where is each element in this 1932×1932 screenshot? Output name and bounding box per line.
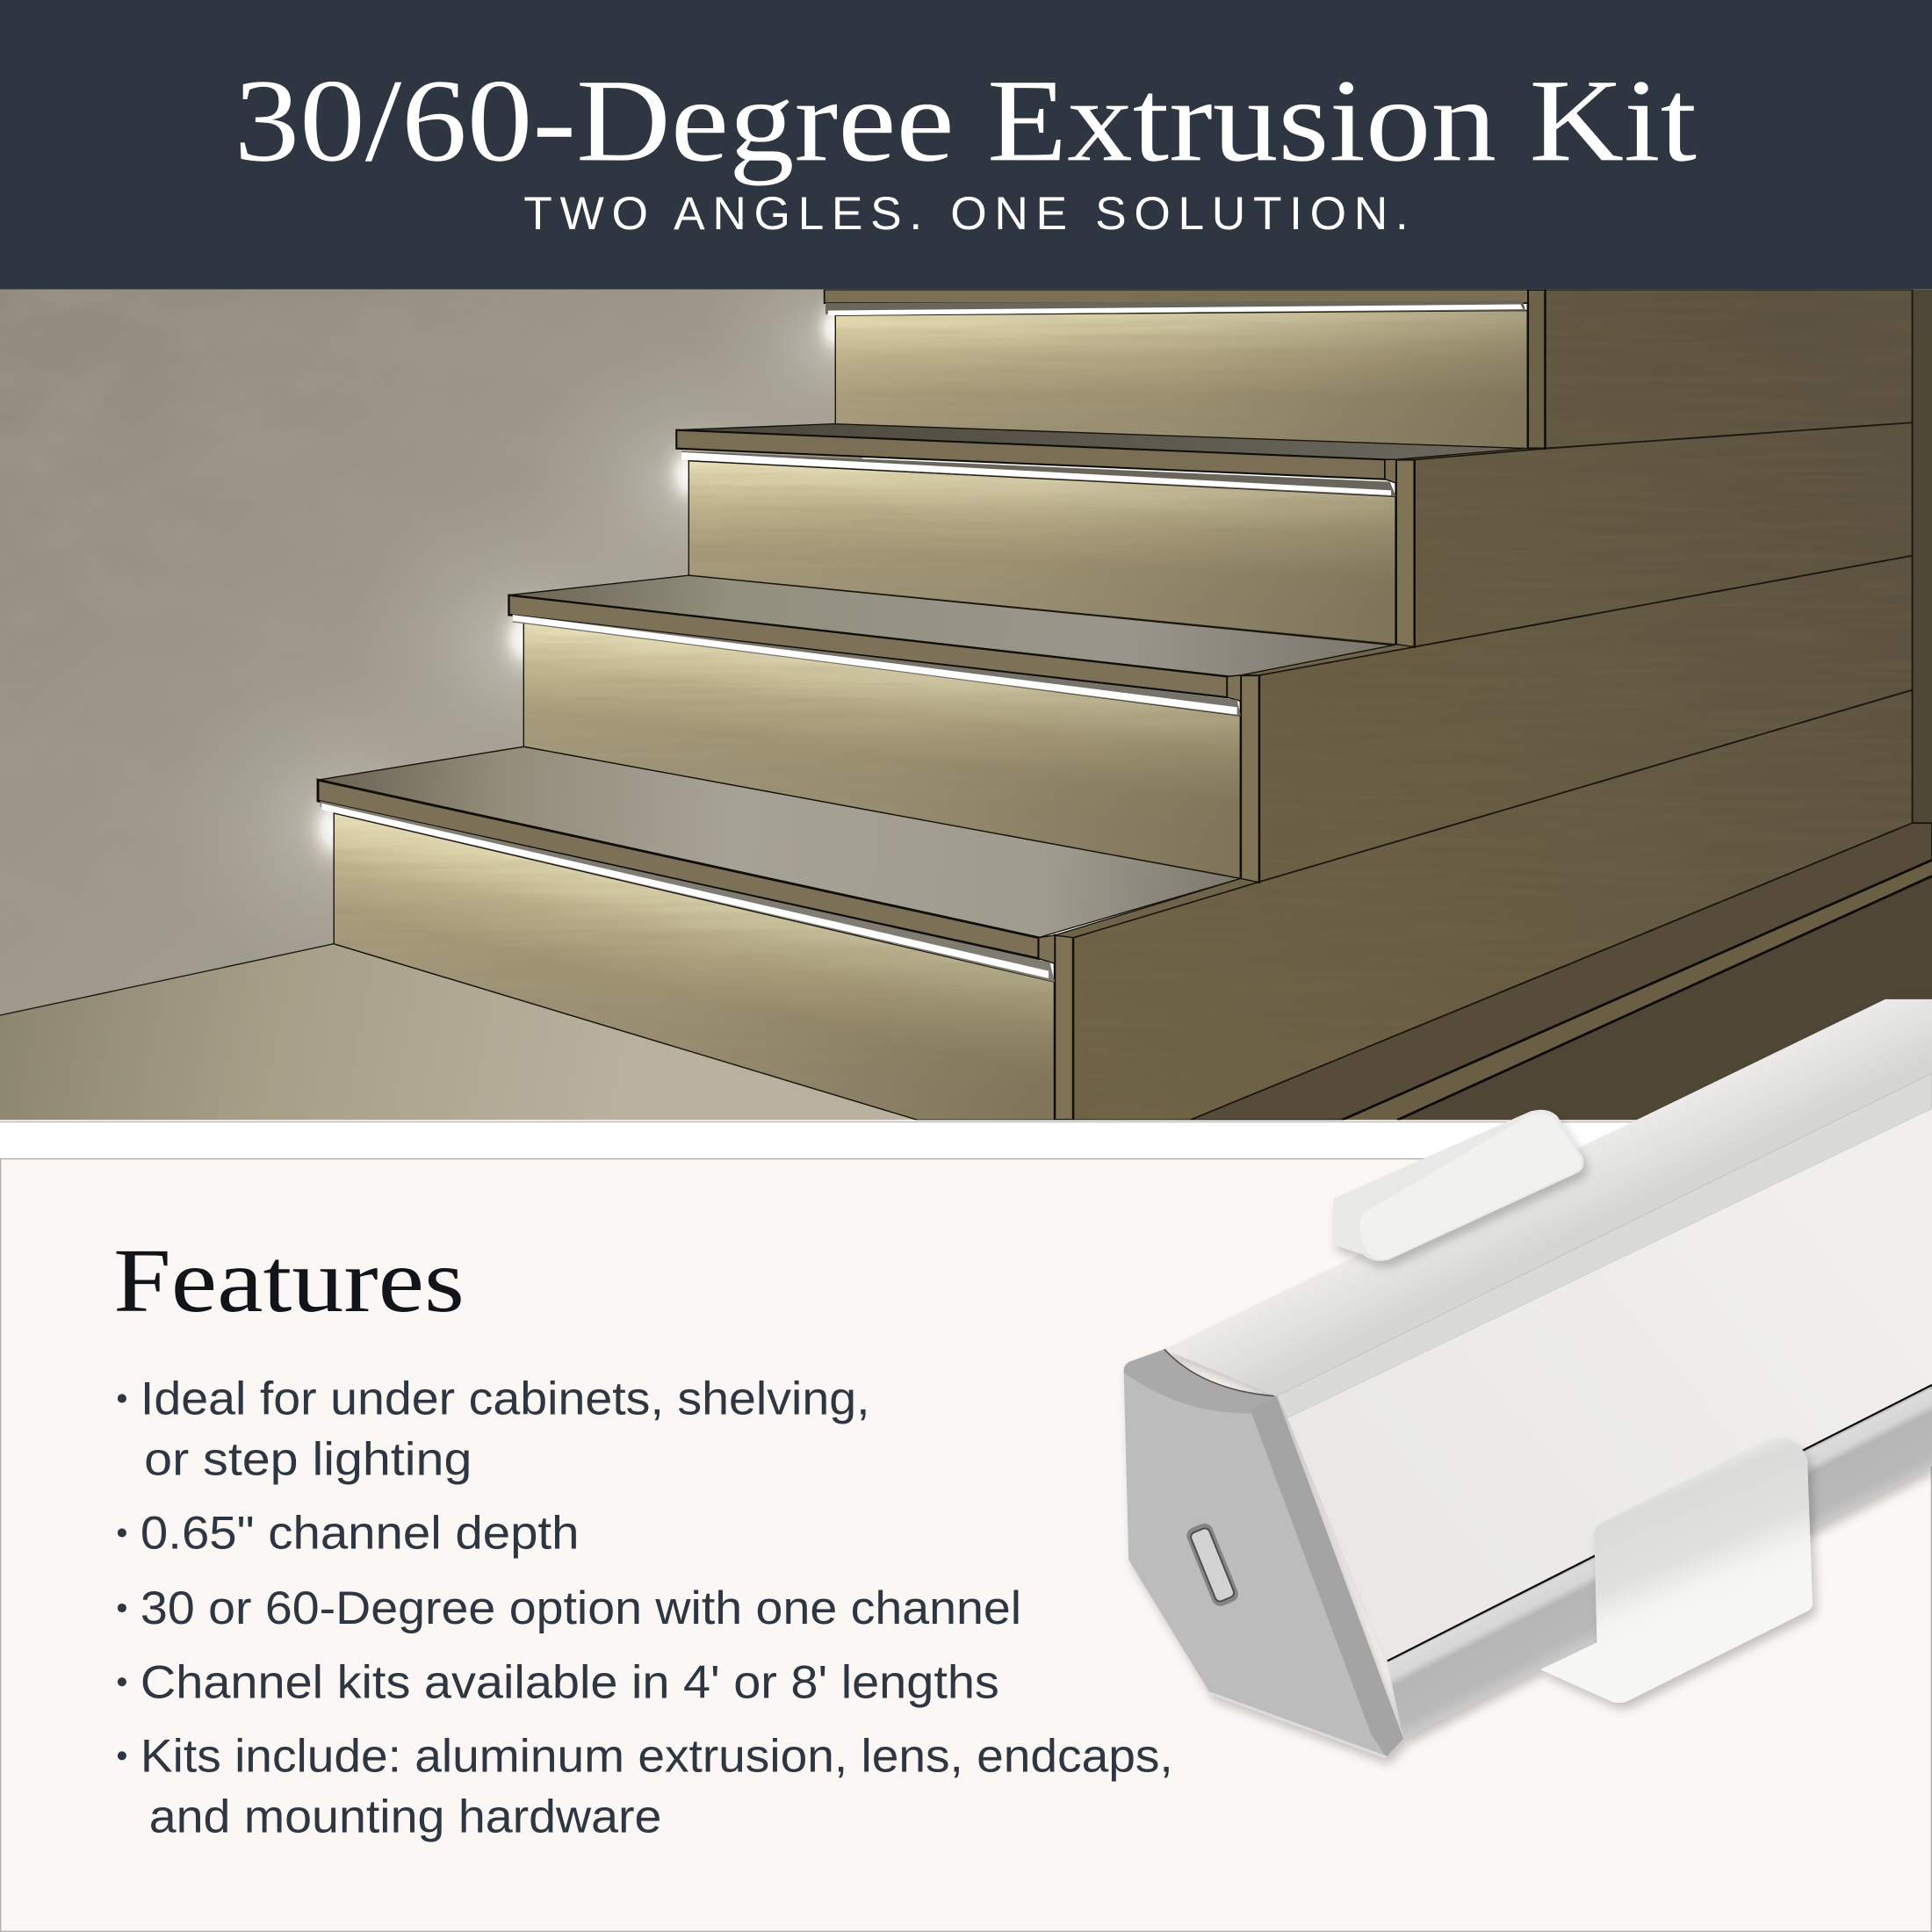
bullet: kit contents — [118, 1731, 1173, 1842]
wall light glows — [307, 302, 835, 866]
riser: step 4 — [835, 311, 1528, 449]
floor — [0, 944, 918, 1120]
screw slot — [1184, 1521, 1241, 1609]
concrete wall — [0, 290, 862, 1029]
lower aluminum rail — [1388, 1388, 1932, 1739]
bullet: lengths: Channel kits available in 4' or 8' lengths — [141, 1656, 999, 1708]
bullet: ideal uses: or step lighting — [144, 1433, 472, 1485]
upper aluminum rim — [1277, 1073, 1932, 1418]
bullet: angle option: 30 or 60-Degree option with one channel — [141, 1582, 1021, 1634]
bullet: channel depth: 0.65" channel depth — [141, 1508, 579, 1560]
product: aluminum extrusion with lens and clips — [1124, 999, 1932, 1757]
title: 30/60-Degree Extrusion Kit — [234, 55, 1697, 186]
photo bottom rule — [0, 1121, 1932, 1122]
top rounded face — [1164, 999, 1932, 1396]
photo: illuminated staircase — [0, 234, 1932, 1120]
back mounting clip — [1333, 1110, 1583, 1261]
stair side panels — [1073, 290, 1913, 1120]
panel: features background — [1, 1159, 1931, 1931]
bullet list — [118, 1373, 1173, 1842]
subtitle: TWO ANGLES. ONE SOLUTION. — [523, 188, 1409, 240]
features heading: Features — [113, 1230, 465, 1331]
riser right-hand shading — [474, 311, 1526, 1120]
bullet: kit contents: and mounting hardware — [149, 1791, 661, 1842]
riser: step 3 — [688, 461, 1396, 645]
baseboard — [1190, 823, 1932, 1120]
bullet: ideal uses — [118, 1373, 870, 1485]
wall light fans — [241, 290, 834, 915]
endcap — [1124, 1349, 1403, 1757]
tread: step 1 — [318, 746, 1258, 982]
diffusing lens — [1287, 1109, 1932, 1661]
bullet: ideal uses: Ideal for under cabinets, shelving, — [141, 1373, 870, 1425]
tread: step 2 — [508, 575, 1415, 716]
right background column — [1913, 290, 1932, 869]
tread: step 3 — [676, 424, 1545, 496]
extrusion body — [1124, 999, 1932, 1757]
panel: features text — [113, 1230, 1173, 1842]
bullet: kit contents: Kits include: aluminum extrusion, lens, endcaps, — [141, 1731, 1173, 1783]
front mounting clip — [1540, 1438, 1813, 1703]
lens shadow line — [1388, 1385, 1932, 1661]
header banner — [0, 0, 1932, 290]
wood grain overlay — [308, 290, 1922, 1120]
riser: step 1 — [334, 813, 1055, 1120]
end strips — [1055, 290, 1545, 1120]
step 4 nosing and light — [825, 290, 1528, 315]
riser: step 2 — [523, 623, 1241, 878]
